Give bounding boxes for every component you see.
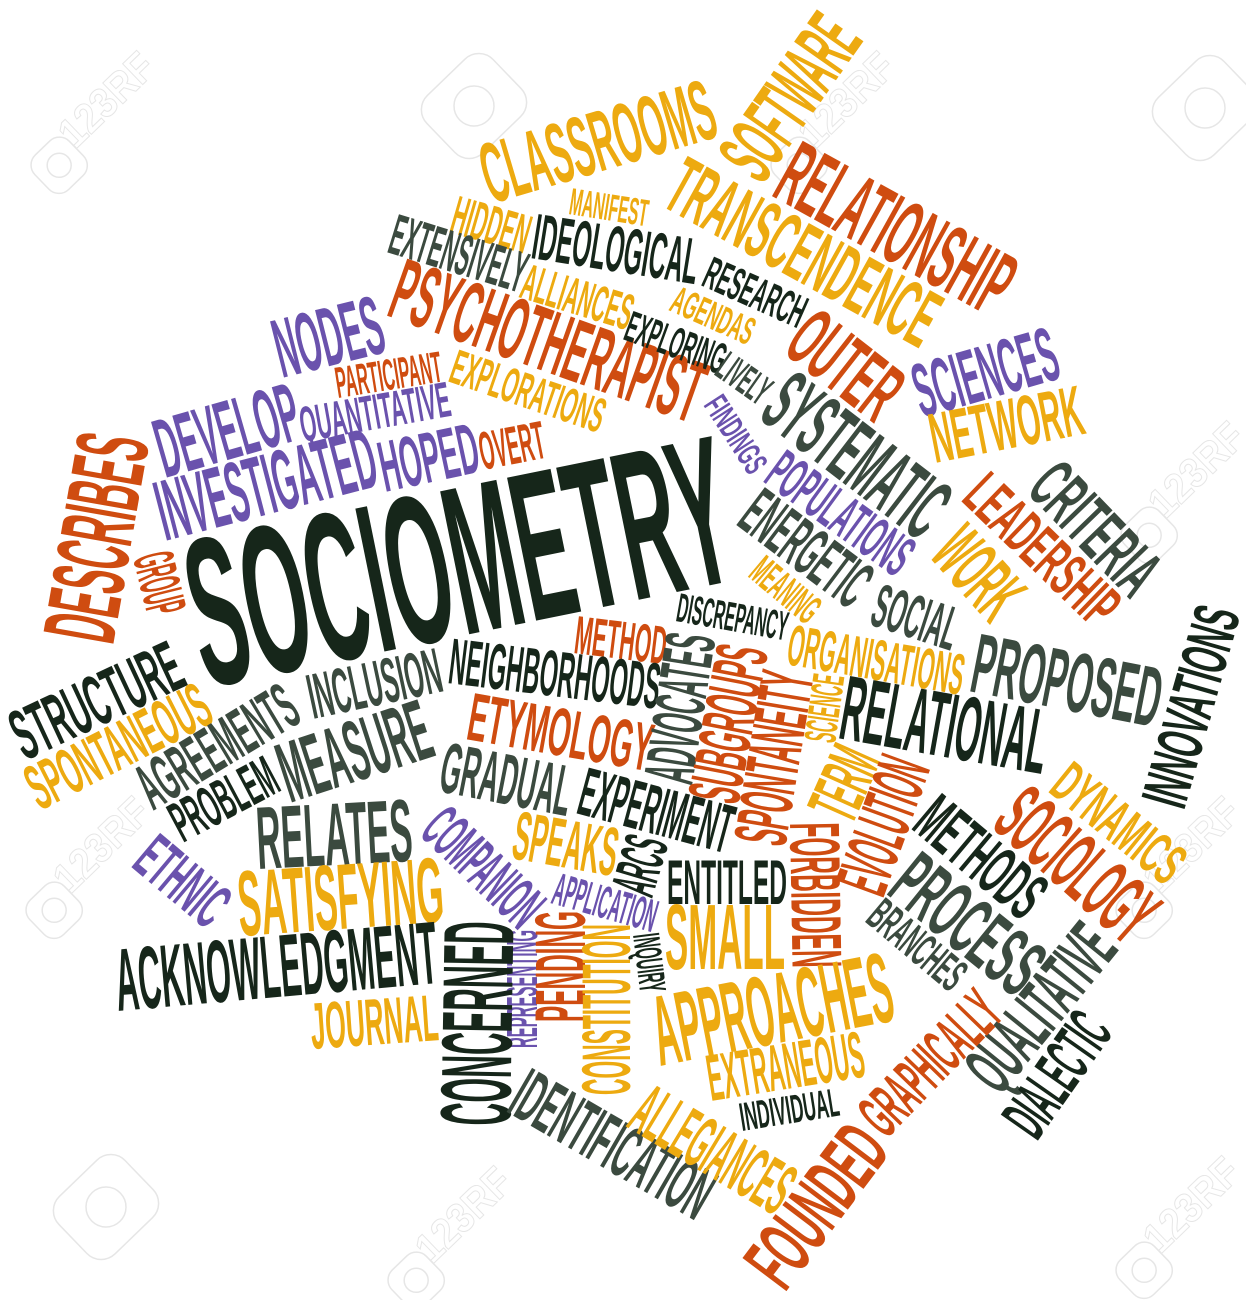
text: PARTICIPANT xyxy=(332,343,445,408)
text: SPONTANEITY xyxy=(718,665,829,851)
text: OVERT xyxy=(474,410,550,482)
word: ETHNIC: ETHNIC xyxy=(121,821,245,941)
text: CONSTITUTION xyxy=(568,924,645,1095)
text: TERM xyxy=(794,734,896,833)
text: ACKNOWLEDGMENT xyxy=(111,902,441,1030)
text: MEASURE xyxy=(266,682,443,821)
text: APPLICATION xyxy=(547,863,663,942)
text: NODES xyxy=(264,278,393,395)
text: MANIFEST xyxy=(567,181,651,235)
text: EXTRANEOUS xyxy=(702,1017,869,1115)
text: IDEOLOGICAL xyxy=(528,200,704,298)
text: GRAPHICALLY xyxy=(844,976,1016,1150)
text: PENDING xyxy=(522,911,601,1022)
text: MEANING xyxy=(741,547,830,632)
watermarks: 123RF xyxy=(406,1158,521,1271)
text: ADVOCATES xyxy=(630,628,731,789)
text: SPONTANEOUS xyxy=(13,669,223,823)
text: PSYCHOTHERAPIST xyxy=(379,240,718,441)
text: QUANTITATIVE xyxy=(295,371,455,453)
text: ARCS xyxy=(599,828,682,903)
text: DIALECTIC xyxy=(988,998,1125,1150)
text: DISCREPANCY xyxy=(673,585,792,649)
text: COMPANION xyxy=(408,794,558,941)
watermarks: 123RF xyxy=(789,43,904,156)
word: OUTER: OUTER xyxy=(770,291,922,438)
text: INCLUSION xyxy=(301,634,448,733)
text: CONCERNED xyxy=(420,920,536,1126)
text: AGREEMENTS xyxy=(122,669,311,823)
word: WORK: WORK xyxy=(915,510,1042,636)
word: LIVELY: LIVELY xyxy=(708,343,781,413)
text: JOURNAL xyxy=(308,980,441,1063)
text: DESCRIBES xyxy=(21,425,171,650)
text: EXPERIMENT xyxy=(571,753,742,868)
text: DEVELOP xyxy=(144,365,310,495)
text: GRADUAL xyxy=(434,728,579,832)
text: ENERGETIC xyxy=(726,474,887,622)
text: AGENDAS xyxy=(664,279,761,354)
text: METHOD xyxy=(572,605,670,676)
text: INVESTIGATED xyxy=(146,410,387,559)
text: EVOLUTION xyxy=(820,745,946,904)
text: HOPED xyxy=(372,409,486,508)
text: SCIENCE xyxy=(794,671,854,745)
word: BRANCHES: BRANCHES xyxy=(858,888,977,1001)
word: PROCESS: PROCESS xyxy=(874,836,1062,1013)
text: EXPLORATIONS xyxy=(443,340,612,443)
text: SMALL xyxy=(665,885,785,989)
text: STRUCTURE xyxy=(0,627,196,776)
text: INDIVIDUAL xyxy=(737,1081,842,1140)
text: REPRESENTING xyxy=(498,930,547,1048)
text: SOCIAL xyxy=(864,572,968,664)
text: SUBGROUPS xyxy=(672,638,784,809)
text: HIDDEN xyxy=(445,184,538,265)
word: FINDINGS: FINDINGS xyxy=(696,389,774,481)
text: EXPLORING xyxy=(619,302,733,384)
text: SPEAKS xyxy=(507,797,624,891)
text: SYSTEMATIC xyxy=(745,353,969,557)
text: ALLIANCES xyxy=(515,253,640,341)
watermarks: 123RF xyxy=(44,788,159,901)
text: SATISFYING xyxy=(234,838,447,956)
text: EXTENSIVELY xyxy=(382,202,535,305)
text: POPULATIONS xyxy=(754,438,927,589)
text: ETYMOLOGY xyxy=(462,679,659,786)
text: GROUP xyxy=(120,545,198,621)
text: RESEARCH xyxy=(696,247,815,338)
text: ENTITLED xyxy=(667,848,787,918)
watermarks: 123RF xyxy=(49,43,164,156)
word: METHODS: METHODS xyxy=(900,781,1062,933)
text: INQUIRY xyxy=(624,931,673,995)
text: NEIGHBORHOODS xyxy=(445,624,665,723)
text: PROBLEM xyxy=(159,744,289,854)
word: FOUNDED: FOUNDED xyxy=(727,1108,906,1300)
text: RELATES xyxy=(254,780,415,888)
text: FORBIDDEN xyxy=(774,822,856,968)
